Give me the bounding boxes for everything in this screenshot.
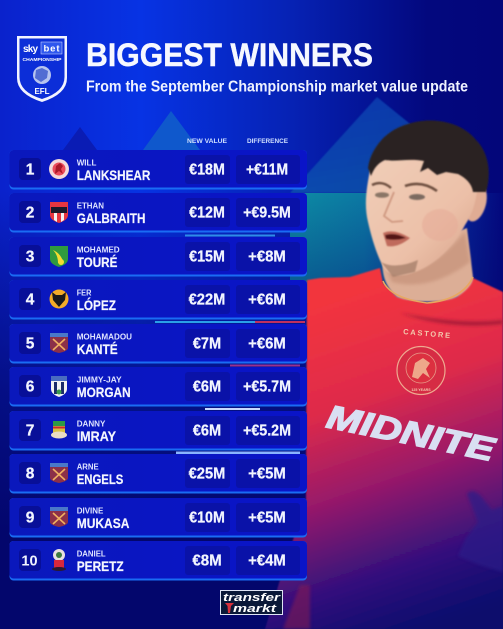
rank: 8 — [26, 466, 35, 482]
player ear — [461, 182, 491, 224]
face features — [372, 183, 458, 277]
player hand — [458, 491, 503, 572]
row 1 — [10, 150, 307, 190]
icon: Wolves badge — [50, 290, 68, 308]
logo: sky text: sky — [23, 44, 38, 55]
player name — [77, 288, 116, 313]
player neck — [382, 228, 473, 302]
subtitle: From the September Championship market value update — [86, 78, 468, 96]
logo: CHAMPIONSHIP text: CHAMPIONSHIP — [22, 57, 62, 62]
player name: KANTÉ — [77, 341, 118, 357]
player name — [77, 244, 120, 270]
player name: WILL — [77, 158, 96, 168]
player photo — [265, 121, 503, 629]
new value: €22M — [189, 292, 225, 308]
icon: Norwich badge — [50, 246, 68, 267]
club crest: 125 YEARS — [411, 388, 431, 392]
icon: Middlesbrough badge — [49, 159, 69, 179]
player name: GALBRAITH — [77, 210, 145, 226]
player face — [366, 150, 478, 275]
player name: MUKASA — [77, 515, 129, 531]
player name: DANIEL — [77, 548, 106, 558]
icon: West Ham badge — [50, 333, 68, 353]
highlights between rows — [155, 234, 305, 454]
player name — [77, 200, 145, 226]
player name — [77, 332, 132, 357]
difference: +€11M — [246, 162, 288, 178]
player name: PERETZ — [77, 558, 124, 574]
player name: ARNE — [77, 462, 99, 472]
rank: 1 — [26, 162, 35, 178]
difference: +€5.7M — [243, 378, 291, 396]
rank: 9 — [26, 510, 35, 526]
player name: LANKSHEAR — [77, 167, 150, 183]
difference: +€5M — [248, 466, 286, 482]
rank: 7 — [26, 422, 34, 440]
difference: +€5M — [248, 510, 286, 526]
rank: 6 — [26, 378, 35, 396]
Transfermarkt logo — [220, 590, 282, 615]
player name: LÓPEZ — [77, 296, 116, 313]
new value: €12M — [189, 204, 225, 222]
Transfermarkt logo: markt — [233, 603, 278, 615]
row 8 — [10, 454, 307, 494]
row 9 — [10, 498, 307, 538]
logo: bet box: bet — [44, 44, 60, 54]
rank: 3 — [26, 248, 35, 266]
column heading: difference: DIFFERENCE — [247, 138, 289, 145]
rank: 5 — [26, 336, 35, 352]
player shirt — [265, 268, 503, 629]
new value: €6M — [193, 422, 221, 440]
new value: €18M — [189, 162, 225, 178]
player name: DIVINE — [77, 506, 104, 516]
difference: +€8M — [248, 248, 286, 266]
player name — [77, 462, 123, 487]
row 3 — [10, 237, 307, 276]
row 2 — [10, 193, 307, 232]
rank: 10 — [21, 554, 38, 570]
shirt fold — [400, 313, 503, 326]
row 4 — [10, 280, 307, 320]
icon: Wrexham badge — [51, 421, 67, 438]
difference: +€6M — [248, 336, 286, 352]
player name: MOHAMADOU — [77, 332, 132, 342]
new value: €15M — [189, 248, 225, 266]
rank: 2 — [26, 204, 34, 222]
row 7 — [10, 411, 307, 450]
player name: IMRAY — [77, 428, 117, 444]
player name: JIMMY-JAY — [77, 374, 122, 384]
player name: DANNY — [77, 418, 106, 428]
icon: Southampton badge — [52, 549, 66, 571]
row 6 — [10, 367, 307, 406]
new value: €25M — [189, 466, 225, 482]
player name: ETHAN — [77, 200, 104, 210]
player name — [77, 374, 131, 400]
player hair — [368, 121, 489, 192]
player name — [77, 548, 124, 574]
rank: 4 — [26, 292, 35, 308]
player name: MORGAN — [77, 384, 131, 400]
logo: ball — [33, 66, 51, 84]
player name: MOHAMED — [77, 244, 120, 254]
neck shadow — [386, 232, 470, 284]
player name: TOURÉ — [77, 254, 117, 270]
row 5 — [10, 324, 307, 364]
logo: EFL text: EFL — [34, 87, 50, 96]
club crest — [397, 346, 445, 394]
icon: striped club badge — [50, 202, 68, 223]
icon: West Ham badge — [50, 507, 68, 527]
player name: FER — [77, 288, 91, 298]
difference: +€6M — [248, 292, 286, 308]
title: BIGGEST WINNERS — [86, 37, 373, 73]
row 10 — [10, 541, 307, 580]
player name: ENGELS — [77, 471, 123, 487]
logo: Sky Bet Championship EFL — [17, 36, 67, 102]
difference: +€5.2M — [243, 422, 291, 440]
icon: West Brom badge — [51, 376, 67, 397]
difference: +€9.5M — [243, 204, 291, 222]
CASTORE shirt text: CASTORE — [403, 327, 450, 340]
MIDNITE sponsor: MIDNITE — [324, 398, 499, 468]
new value: €10M — [189, 510, 225, 526]
player name — [77, 418, 117, 444]
player name — [77, 158, 150, 183]
shirt collar — [383, 277, 473, 303]
column heading: new value: NEW VALUE — [187, 138, 228, 145]
player name — [77, 506, 129, 531]
shirt lower-left glow — [283, 585, 310, 629]
new value: €6M — [193, 378, 221, 396]
difference: +€4M — [248, 552, 286, 570]
new value: €7M — [193, 336, 221, 352]
icon: West Ham badge — [50, 463, 68, 483]
new value: €8M — [192, 552, 222, 570]
Transfermarkt logo: transfer — [223, 592, 281, 604]
